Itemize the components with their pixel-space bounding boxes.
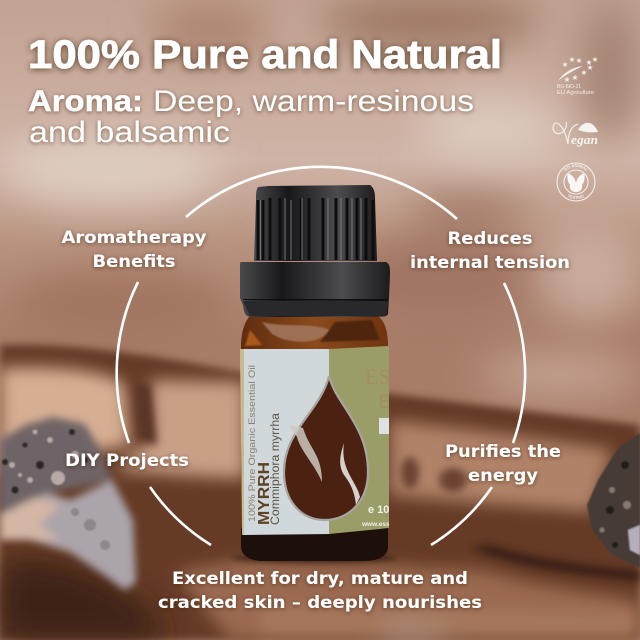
label drop <box>284 376 368 520</box>
icon: no animal testing badge <box>556 162 596 202</box>
icon: EU organic leaf <box>557 55 599 96</box>
aroma subtitle <box>28 85 474 149</box>
label white part <box>240 349 330 535</box>
label: aromatherapy benefits <box>62 228 207 271</box>
label: aromatherapy benefits: Aromatherapy <box>62 228 207 247</box>
product bottle: www.essen <box>361 521 397 528</box>
icon: EU organic leaf: ★ <box>569 55 576 64</box>
right mineral rock <box>587 433 640 568</box>
product bottle: MYRRH <box>256 462 273 525</box>
label: purifies the energy: Purifies the <box>445 442 561 461</box>
white circle arcs <box>117 167 525 545</box>
title: 100% Pure and Natural <box>28 33 502 77</box>
aroma subtitle: and balsamic <box>29 116 230 149</box>
icon: no animal testing badge: NO ANIMAL <box>564 164 588 172</box>
icon: EU organic leaf: BG-BIO-21 <box>557 84 581 90</box>
icon: no animal testing badge: TESTING <box>568 194 584 199</box>
label: skin benefit <box>158 569 482 612</box>
label vertical text: 100% Pure Organic Essential Oil <box>247 365 258 522</box>
icon: EU organic leaf: ★ <box>592 55 599 64</box>
dark base <box>241 526 388 561</box>
label: reduces internal tension <box>410 229 570 272</box>
aroma subtitle: Aroma: <box>28 85 143 118</box>
label: aromatherapy benefits: Benefits <box>92 252 176 271</box>
logo text: ESS <box>365 364 403 389</box>
lower scene fills <box>0 345 640 640</box>
benefit labels <box>62 228 570 612</box>
label: DIY projects: DIY Projects <box>65 451 189 470</box>
icon: EU organic leaf: ★ <box>576 56 583 65</box>
icon: EU organic leaf: EU Agriculture <box>557 90 594 96</box>
product bottle <box>232 185 403 563</box>
label: skin benefit: Excellent for dry, mature and <box>172 569 468 588</box>
icon: EU organic leaf: ★ <box>572 73 579 82</box>
bottle shadow <box>232 553 396 563</box>
label: purifies the energy: energy <box>468 466 538 485</box>
icon: EU organic leaf: ★ <box>587 63 594 72</box>
icon: vegan mark <box>553 122 598 147</box>
icon: EU organic leaf: ★ <box>562 60 569 69</box>
label: skin benefit: cracked skin – deeply nourishes <box>158 593 482 612</box>
amber glass body <box>241 316 388 561</box>
label: reduces internal tension: Reduces <box>448 229 533 248</box>
left mineral rock <box>0 417 136 590</box>
product bottle: Bu <box>379 392 402 413</box>
label: purifies the energy <box>445 442 561 485</box>
certification icons <box>552 55 599 202</box>
product bottle: Commiphora myrrha <box>270 412 282 525</box>
icon: EU organic leaf: ★ <box>581 68 588 77</box>
label: reduces internal tension: internal tension <box>410 253 570 272</box>
product bottle: e 10m <box>368 504 399 516</box>
label green part <box>329 346 389 534</box>
icon: EU organic leaf: ★ <box>586 58 593 67</box>
icon: vegan mark: egan <box>571 133 598 147</box>
ribbed cap top <box>254 185 377 261</box>
dropper cap collar <box>240 262 390 317</box>
icon: EU organic leaf: ★ <box>564 75 571 84</box>
aroma subtitle: Deep, warm-resinous <box>153 85 474 118</box>
